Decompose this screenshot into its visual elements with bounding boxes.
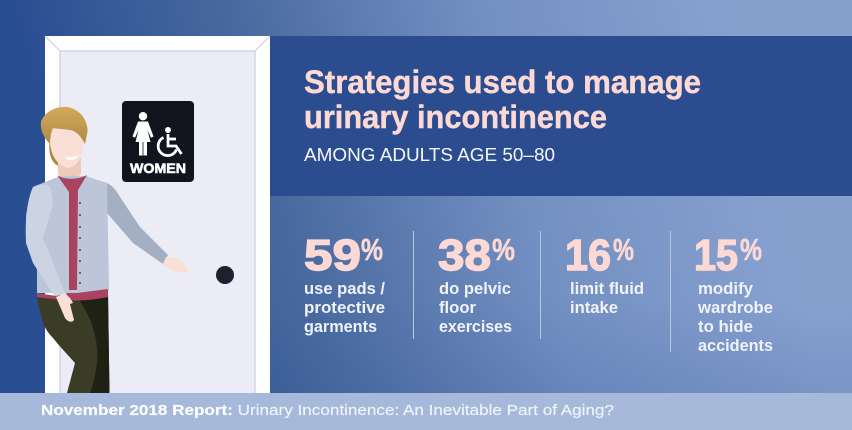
hair: [41, 107, 88, 144]
title: urinary incontinence: [304, 99, 607, 135]
stat: 59%: 59: [304, 231, 361, 280]
divider: [670, 231, 671, 352]
smile: [65, 155, 78, 160]
icon: woman figure: [132, 112, 154, 156]
stat: 38%: do pelvic: [439, 279, 511, 298]
stat: 15%: 15: [694, 231, 738, 280]
stat: 38%: %: [492, 232, 515, 267]
blouse hem: [37, 289, 108, 301]
stat: 15%: to hide: [698, 317, 753, 336]
stat: 59%: use pads /: [304, 279, 385, 298]
stat: 16%: %: [613, 232, 634, 267]
stat: 15%: modify: [698, 279, 754, 298]
footer bar: [0, 393, 852, 430]
hand on door: [163, 257, 189, 273]
face: [50, 124, 84, 168]
divider: [540, 231, 541, 339]
stat: 15%: accidents: [698, 336, 773, 355]
divider: [413, 231, 414, 339]
stat: 15%: %: [740, 232, 762, 267]
trousers: [37, 293, 110, 393]
left sleeve: [26, 184, 65, 297]
stat: 16%: limit fluid: [570, 279, 644, 298]
restroom sign: [122, 101, 194, 182]
door: [45, 36, 270, 393]
woman illustration: [26, 107, 189, 393]
stat: 59%: %: [361, 232, 383, 267]
stat: 38%: floor: [439, 298, 476, 317]
stat: 38%: exercises: [439, 317, 512, 336]
footer text: November 2018 Report: Urinary Incontinence: An Inevitable Part of Aging?: [41, 402, 614, 419]
left hand: [56, 293, 74, 322]
cardigan buttons: [79, 202, 81, 284]
stat: 59%: protective: [304, 298, 385, 317]
subtitle: AMONG ADULTS AGE 50–80: [304, 144, 555, 165]
title: Strategies used to manage: [304, 64, 701, 100]
stat: 16%: [565, 231, 644, 317]
stat: 59%: garments: [304, 317, 377, 336]
stat: 38%: [438, 231, 515, 336]
door knob: [216, 266, 234, 284]
stat: 38%: 38: [438, 231, 491, 280]
sign label: WOMEN: [130, 160, 186, 176]
stat: 16%: 16: [565, 231, 611, 280]
icon: wheelchair: [158, 127, 182, 156]
stat: 16%: intake: [570, 298, 618, 317]
neck: [58, 158, 81, 178]
stat: 15%: [694, 231, 773, 355]
right arm: [105, 182, 168, 264]
blouse placket: [57, 175, 87, 290]
cardigan: [26, 176, 109, 293]
stat: 15%: wardrobe: [697, 298, 773, 317]
title: [304, 64, 701, 135]
header band: [270, 36, 852, 196]
hair bun: [49, 140, 65, 167]
stat: 59%: [304, 231, 385, 336]
